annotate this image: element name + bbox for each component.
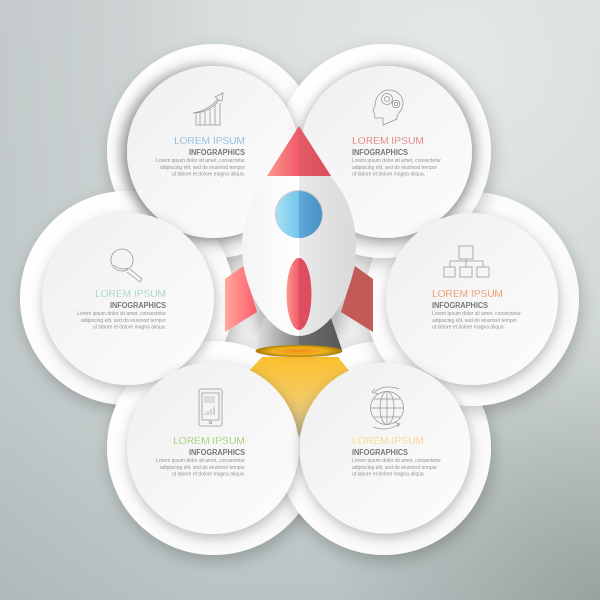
heading: left: LOREM IPSUM xyxy=(95,289,166,300)
body text: right: Lorem ipsum dolor sit amet, consectetur xyxy=(432,311,521,317)
heading: bottom right: LOREM IPSUM xyxy=(352,436,424,447)
rocket body xyxy=(242,176,356,336)
rocket shadow xyxy=(254,290,344,350)
central base plate xyxy=(189,190,409,410)
body text: bottom left: adipiscing elit, sed do eiusmod tempor xyxy=(160,465,245,471)
panel: left xyxy=(42,213,214,385)
outer plate: right xyxy=(365,192,579,406)
body text: right: adipiscing elit, sed do eiusmod tempor xyxy=(432,318,517,324)
heading: bottom left: LOREM IPSUM xyxy=(173,436,245,447)
body text: top left: adipiscing elit, sed do eiusmod tempor xyxy=(160,165,245,171)
body text: left: ut labore et dolore magna aliqua. xyxy=(93,324,166,330)
body text: bottom right: Lorem ipsum dolor sit amet, consectetur xyxy=(352,458,441,464)
body text: left: Lorem ipsum dolor sit amet, consectetur xyxy=(77,311,166,317)
heading: top right: LOREM IPSUM xyxy=(352,136,424,147)
body text: top left: Lorem ipsum dolor sit amet, consectetur xyxy=(156,158,245,164)
icon: magnifying glass xyxy=(111,249,142,282)
rocket xyxy=(225,126,373,357)
window xyxy=(275,190,323,238)
body text: top right: ut labore et dolore magna aliqua. xyxy=(352,172,425,178)
body text: left: adipiscing elit, sed do eiusmod tempor xyxy=(81,318,166,324)
icon: globe with arrows xyxy=(370,387,404,429)
body text: left xyxy=(77,311,166,330)
right fin xyxy=(341,266,373,332)
heading: top left: LOREM IPSUM xyxy=(174,136,245,147)
body text: bottom right: adipiscing elit, sed do eiusmod tempor xyxy=(352,465,437,471)
body text: top right: Lorem ipsum dolor sit amet, consectetur xyxy=(352,158,441,164)
body text: top right xyxy=(352,158,441,178)
panel: top left xyxy=(127,66,299,238)
body text: bottom right: ut labore et dolore magna aliqua. xyxy=(352,472,425,478)
subheading: bottom right: INFOGRAPHICS xyxy=(352,447,408,457)
icon: growth chart xyxy=(193,93,223,125)
heading: right: LOREM IPSUM xyxy=(432,289,503,300)
subheading: bottom left: INFOGRAPHICS xyxy=(189,447,245,457)
icon: head with gears xyxy=(373,90,403,125)
flame beam xyxy=(248,357,350,437)
exhaust disc xyxy=(256,345,342,357)
body text: bottom left xyxy=(156,458,245,478)
outer plate: top left xyxy=(107,44,321,258)
body text: top left: ut labore et dolore magna aliqua. xyxy=(172,172,245,178)
outer plate: bottom left xyxy=(107,341,321,555)
icon: tablet xyxy=(199,389,222,426)
nose cone xyxy=(267,126,331,176)
body text: bottom left: Lorem ipsum dolor sit amet, consectetur xyxy=(156,458,245,464)
subheading: top right: INFOGRAPHICS xyxy=(352,147,408,157)
panel: bottom left xyxy=(127,362,299,534)
left fin xyxy=(225,266,257,332)
subheading: left: INFOGRAPHICS xyxy=(110,300,166,310)
body oval xyxy=(286,258,312,330)
body text: bottom right xyxy=(352,458,441,478)
icon: org chart xyxy=(444,246,489,277)
body text: right: ut labore et dolore magna aliqua. xyxy=(432,324,505,330)
subheading: top left: INFOGRAPHICS xyxy=(189,147,245,157)
body text: top right: adipiscing elit, sed do eiusmod tempor xyxy=(352,165,437,171)
body text: top left xyxy=(156,158,245,178)
subheading: right: INFOGRAPHICS xyxy=(432,300,488,310)
body text: right xyxy=(432,311,521,330)
body text: bottom left: ut labore et dolore magna aliqua. xyxy=(172,472,245,478)
panel: bottom right xyxy=(300,362,470,534)
nozzle xyxy=(256,318,342,350)
panel: top right xyxy=(300,66,472,238)
outer plate: bottom right xyxy=(277,341,491,555)
outer plate: top right xyxy=(277,44,491,258)
outer plate: left xyxy=(20,191,234,405)
panel: right xyxy=(386,213,558,385)
